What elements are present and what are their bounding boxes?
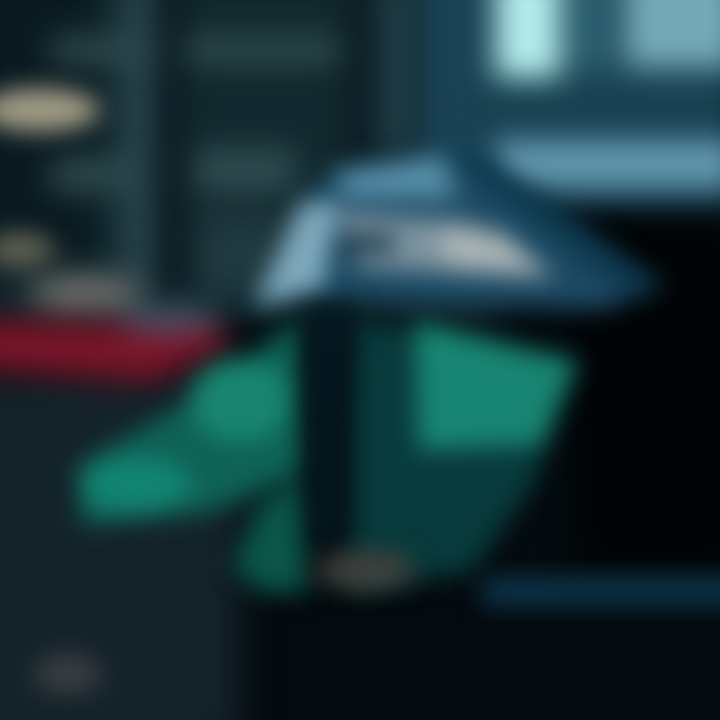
car: dark central pillar (305, 305, 358, 540)
car: roof and windshield (250, 150, 665, 310)
car: right green panel (350, 318, 578, 590)
car: left green panel (78, 318, 308, 592)
foreground: pale spot lower left (34, 654, 102, 694)
car: beige highlight (315, 550, 415, 590)
foreground: blue strip (482, 576, 720, 606)
background: upper right window (420, 0, 720, 210)
background: building windows (50, 0, 407, 300)
background: upper left building (0, 0, 500, 320)
background: lower left ground (0, 375, 240, 720)
car: red stripe (0, 275, 232, 382)
background: dark right side (575, 222, 720, 567)
background: pale lights on the left (0, 88, 100, 268)
